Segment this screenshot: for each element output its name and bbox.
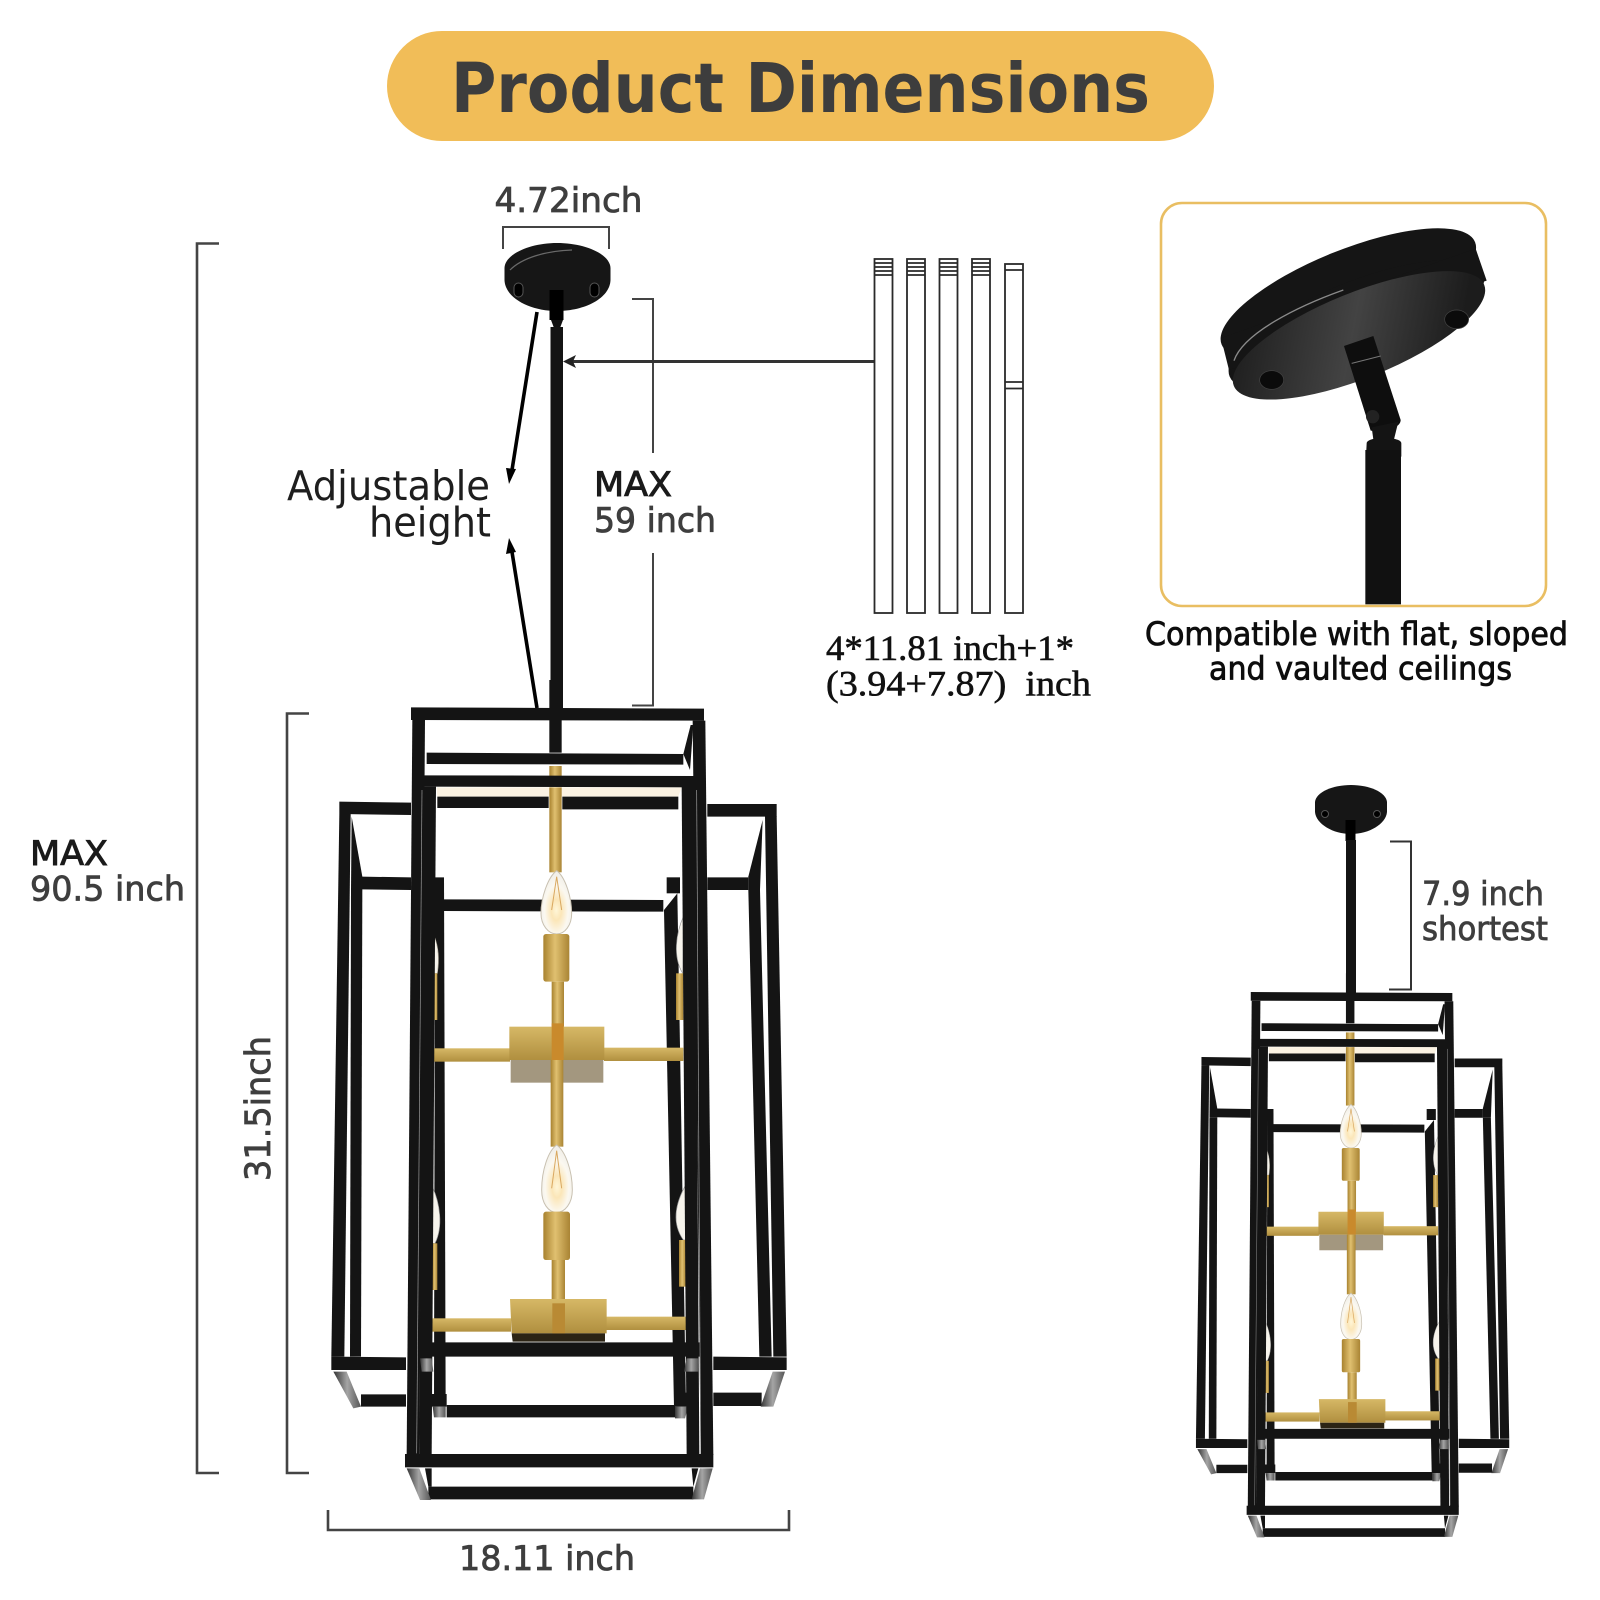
small lantern <box>1196 973 1509 1537</box>
title pill <box>387 31 1214 141</box>
label: max 90.5 inch: MAX <box>30 834 108 874</box>
label: max 90.5 inch <box>30 834 185 910</box>
rod 5 <box>1005 264 1023 613</box>
label: rod sizes: 4*11.81 inch+1* <box>826 628 1074 668</box>
arrow: extension rods to pole <box>563 355 874 368</box>
label: ceiling compatibility: Compatible with flat, sloped <box>1145 615 1568 653</box>
label: ceiling compatibility <box>1145 615 1568 688</box>
title pill: Product Dimensions <box>451 49 1150 129</box>
label: 7.9 inch shortest: 7.9 inch <box>1422 874 1544 913</box>
label: adjustable height <box>287 462 491 546</box>
large lantern <box>331 680 787 1500</box>
label: max 59 inch: MAX <box>594 465 672 505</box>
arrow: adjustable up <box>506 312 537 484</box>
label: ceiling compatibility: and vaulted ceilings <box>1209 650 1512 688</box>
bracket: width <box>328 1510 789 1530</box>
small lantern canopy and pole <box>1315 785 1387 993</box>
label: rod sizes <box>826 628 1091 704</box>
warm glow under top bar <box>437 787 682 797</box>
rod 4 <box>972 259 990 613</box>
label: 31.5 inch: 31.5inch <box>239 1036 279 1181</box>
left side frame <box>331 802 411 1408</box>
bracket: max 59 inch <box>632 299 653 706</box>
front frame <box>405 707 713 1499</box>
label: rod sizes: (3.94+7.87) inch <box>826 664 1091 704</box>
side bulbs <box>434 937 438 973</box>
bracket: shortest <box>1389 842 1411 990</box>
label: adjustable height: Adjustable <box>287 462 490 510</box>
label: 7.9 inch shortest <box>1422 874 1548 948</box>
highlights and steel corners <box>407 790 713 1500</box>
extension rods <box>874 259 1023 613</box>
rod 1 <box>874 259 892 613</box>
arrow: adjustable down <box>506 538 537 708</box>
bracket: canopy width <box>503 227 609 249</box>
label: adjustable height: height <box>369 498 491 546</box>
label: 4.72 inch: 4.72inch <box>494 181 642 221</box>
label: max 59 inch: 59 inch <box>594 501 716 541</box>
label: max 90.5 inch: 90.5 inch <box>30 870 185 910</box>
label: 7.9 inch shortest: shortest <box>1422 909 1548 948</box>
rod 3 <box>940 259 958 613</box>
right side frame <box>707 804 787 1407</box>
bracket: overall height <box>197 244 219 1473</box>
rod 2 <box>907 259 925 613</box>
panel: canopy close-up <box>1161 202 1546 606</box>
close-up canopy <box>1205 202 1500 604</box>
middle back frame <box>420 877 698 1417</box>
bracket: lantern height <box>287 714 309 1473</box>
large canopy and pole <box>504 243 610 709</box>
gold fixture <box>431 680 687 1342</box>
label: 18.11 inch: 18.11 inch <box>459 1539 635 1579</box>
label: max 59 inch <box>594 465 716 541</box>
